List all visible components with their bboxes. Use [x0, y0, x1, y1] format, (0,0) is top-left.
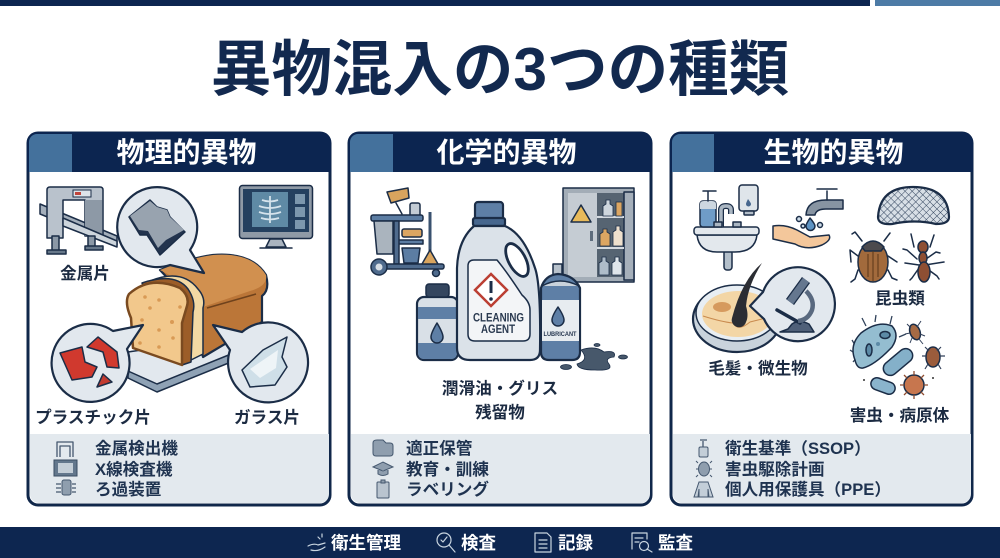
- icon: cleaning agent jug: CLEANING: [473, 312, 524, 324]
- icon: chemical storage cabinet: [563, 188, 634, 282]
- bread loaf with plate: [127, 255, 267, 392]
- item: proper storage: 適正保管: [406, 438, 472, 458]
- panel frame: [349, 133, 651, 505]
- item: pest control plan: 害虫駆除計画: [725, 459, 825, 479]
- icon: lubricant spray can: LUBRICANT: [544, 331, 577, 338]
- plate: [128, 340, 236, 392]
- item: metal detector: 金属検出機: [95, 438, 178, 458]
- label: residues: 残留物: [475, 402, 525, 422]
- icon: lubricant bottle: [417, 284, 458, 360]
- panel header: 物理的異物: [116, 137, 257, 168]
- item: hygiene control: 衛生管理: [331, 533, 401, 553]
- item: inspection: 検査: [461, 533, 496, 553]
- item: labeling: ラベリング: [406, 479, 489, 499]
- label: insects: 昆虫類: [875, 289, 925, 308]
- item: sanitation standards: 衛生基準（SSOP）: [725, 438, 871, 458]
- icon: graduation cap: [373, 462, 393, 476]
- icon: faucet: [806, 189, 843, 215]
- icon: beetle: [850, 232, 897, 282]
- label: plastic fragment: プラスチック片: [35, 408, 151, 427]
- footer bar: [0, 527, 1000, 558]
- icon: bacteria and pests: [850, 315, 945, 399]
- panel: biological contaminants: [670, 132, 973, 505]
- item: education and training: 教育・訓練: [406, 460, 489, 479]
- icon: soap bottle: [699, 440, 708, 457]
- icon: sink with soap: [694, 191, 759, 270]
- panel: chemical contaminants: [348, 132, 652, 505]
- panel header: 化学的異物: [436, 137, 577, 168]
- icon: filter: [56, 480, 76, 495]
- countermeasure list: [694, 438, 891, 499]
- icon: audit: [632, 533, 652, 552]
- icon: pest: [696, 461, 712, 477]
- icon: clipboard: [377, 480, 389, 498]
- label: metal fragment: 金属片: [60, 263, 110, 283]
- callout: metal shard: [117, 187, 204, 273]
- label: pests and pathogens: 害虫・病原体: [850, 405, 950, 425]
- list background: [351, 434, 650, 503]
- label: hair and microorganisms: 毛髪・微生物: [708, 359, 808, 378]
- icon: x-ray monitor: [240, 186, 312, 248]
- slices: [150, 276, 204, 360]
- item: audit: 監査: [658, 533, 693, 553]
- callout: glass shard: [213, 322, 308, 402]
- icon: metal detector on conveyor: [40, 187, 117, 254]
- icon: lubricant spray can: [541, 264, 580, 360]
- callout: plastic fragments: [52, 324, 143, 402]
- icon: cleaning cart: [371, 188, 444, 276]
- panel frame: [671, 133, 972, 505]
- panel header: [348, 132, 652, 172]
- panel header: [670, 132, 973, 172]
- icon: document: [535, 533, 551, 552]
- callout: microscope: [750, 267, 835, 341]
- panel header: [27, 132, 331, 172]
- item: filtration: ろ過装置: [95, 480, 161, 499]
- icon: cleaning agent jug: [457, 202, 540, 360]
- icon: protective coat: [694, 482, 713, 497]
- list background: [673, 434, 971, 503]
- icon: cleaning agent jug: AGENT: [481, 324, 515, 336]
- icon: water droplets and hand: [773, 216, 830, 248]
- panel: physical contaminants: [27, 132, 331, 505]
- title: 異物混入の3つの種類: [211, 35, 789, 103]
- icon: folder: [373, 440, 393, 456]
- loaf: [160, 255, 267, 357]
- countermeasure list: [54, 438, 178, 499]
- countermeasure list: [373, 438, 489, 499]
- icon: magnifier check: [437, 533, 455, 552]
- icon: hand hygiene: [308, 534, 325, 551]
- label: glass fragment: ガラス片: [234, 408, 300, 427]
- label: lubricant and grease: 潤滑油・グリス: [442, 378, 558, 398]
- icon: soap dispenser: [739, 185, 758, 215]
- icon: ant: [903, 234, 944, 282]
- icon: petri dish with hair: [693, 263, 781, 352]
- item: personal protective equipment: 個人用保護具（PPE）: [725, 480, 891, 499]
- item: records: 記録: [558, 533, 593, 553]
- icon: oil spill: [560, 344, 628, 370]
- item: x-ray inspection: X線検査機: [95, 460, 173, 479]
- icon: x-ray: [54, 460, 77, 476]
- icon: hair net: [878, 187, 949, 224]
- icon: detector gate: [57, 442, 73, 457]
- top accent bar: [0, 0, 1000, 6]
- list background: [30, 434, 329, 503]
- panel header: 生物的異物: [763, 137, 904, 168]
- panel frame: [28, 133, 330, 505]
